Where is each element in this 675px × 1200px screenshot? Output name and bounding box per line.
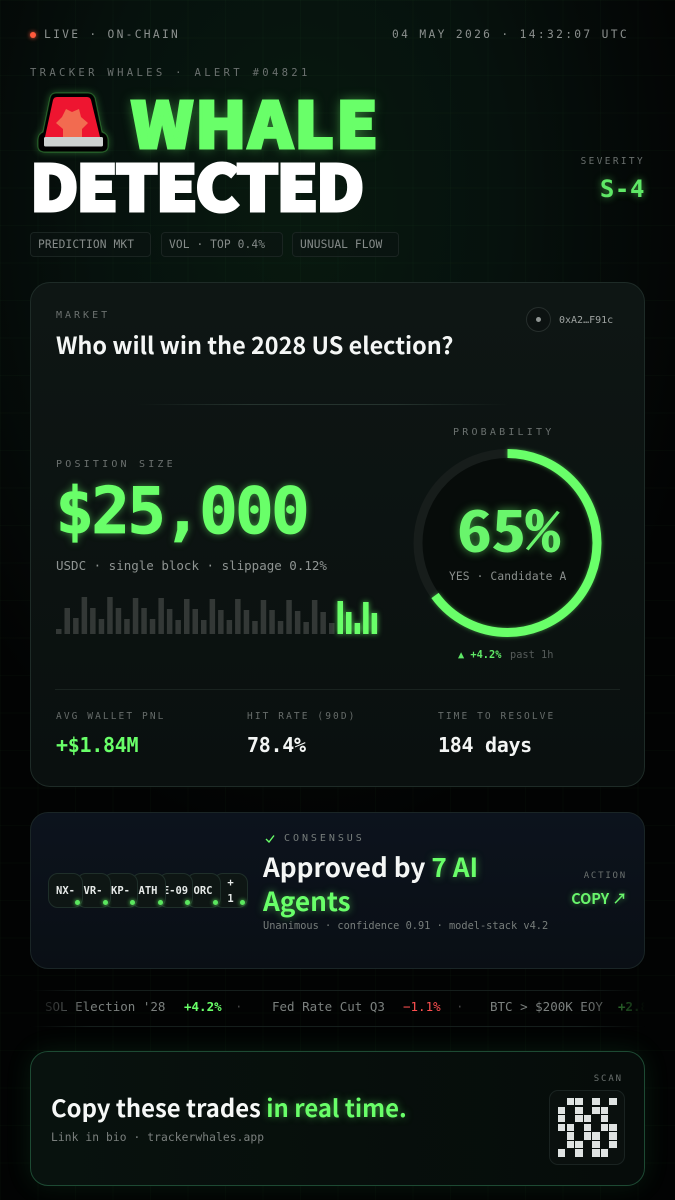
probability delta — [458, 649, 553, 661]
consensus label: CONSENSUS — [284, 833, 365, 844]
tag: unusual flow — [292, 232, 399, 257]
market question: Who will win the 2028 US election? — [56, 327, 453, 361]
agent avatars: E-09 — [163, 884, 188, 896]
ticker: Fed Rate Cut Q3 — [272, 999, 385, 1014]
tag: prediction market: PREDICTION MKT — [38, 238, 134, 251]
status: live on-chain: LIVE · ON-CHAIN — [44, 28, 180, 41]
panel: consensus — [30, 812, 645, 969]
ticker: SOL Election '28 — [45, 999, 165, 1014]
severity block: S-4 — [600, 175, 645, 203]
panel: market — [30, 282, 645, 787]
agent avatars: NX- — [56, 884, 75, 896]
ticker: −1.1% — [403, 999, 441, 1014]
agent avatars: KP- — [111, 884, 130, 896]
probability delta: ▲ +4.2% — [458, 649, 501, 661]
tag: volume: VOL · TOP 0.4% — [169, 238, 265, 251]
probability value: 65% — [457, 485, 559, 569]
position detail: USDC · single block · slippage 0.12% — [56, 558, 327, 573]
action label: ACTION — [584, 871, 627, 881]
stat: avg wallet pnl: +$1.84M — [56, 733, 138, 757]
qr code — [549, 1090, 625, 1165]
heading: whale: WHALE — [131, 76, 380, 166]
agent avatars — [48, 873, 248, 908]
severity block — [581, 156, 648, 203]
probability caption: YES · Candidate A — [449, 570, 566, 583]
agent avatars: VR- — [84, 884, 102, 896]
tag: volume — [161, 232, 283, 257]
probability delta: past 1h — [510, 649, 553, 661]
agent avatars: + — [227, 876, 234, 888]
stat: hit rate — [247, 711, 356, 757]
eyebrow: alert id: TRACKER WHALES · ALERT #04821 — [30, 67, 311, 79]
cta subtext: Link in bio · trackerwhales.app — [51, 1131, 264, 1144]
scan label: SCAN — [594, 1074, 623, 1084]
ticker: · — [235, 999, 243, 1014]
panel: call to action — [30, 1051, 645, 1186]
ticker — [30, 990, 645, 1027]
stat: time to resolve: 184 days — [438, 733, 532, 757]
consensus detail: Unanimous · confidence 0.91 · model-stack v4.2 — [263, 920, 548, 932]
action: copy: COPY ↗ — [571, 888, 627, 909]
stat: hit rate: HIT RATE (90D) — [247, 711, 356, 722]
wallet address: 0xA2…F91c — [559, 315, 613, 326]
cta heading: Copy these trades in real time. — [51, 1089, 407, 1124]
tag: unusual flow: UNUSUAL FLOW — [300, 238, 382, 251]
position size label: POSITION SIZE — [56, 459, 176, 470]
heading: detected: DETECTED — [30, 138, 362, 230]
timestamp: 04 MAY 2026 · 14:32:07 UTC — [392, 28, 629, 41]
probability label: PROBABILITY — [453, 427, 554, 438]
wallet address — [526, 307, 613, 332]
agent avatars: ATH — [139, 884, 157, 896]
icon: siren — [33, 88, 113, 157]
position size value: $25,000 — [56, 475, 307, 549]
agent avatars: 1 — [227, 892, 234, 904]
stat: time to resolve: TIME TO RESOLVE — [438, 711, 555, 722]
tag: prediction market — [30, 232, 151, 257]
stat: avg wallet pnl — [56, 711, 165, 757]
probability ring — [414, 446, 604, 640]
severity block: SEVERITY — [581, 156, 645, 167]
agent avatars: ORC — [194, 884, 212, 896]
ticker: +4.2% — [184, 999, 222, 1014]
stat: time to resolve — [438, 711, 555, 757]
consensus heading: Approved by 7 AI Agents — [263, 847, 478, 919]
ticker: · — [456, 999, 464, 1014]
market label: MARKET — [56, 310, 110, 321]
stat: avg wallet pnl: AVG WALLET PNL — [56, 711, 165, 722]
ticker: BTC > $200K EOY — [490, 999, 603, 1014]
stat: hit rate: 78.4% — [247, 733, 306, 757]
bar chart — [56, 597, 382, 638]
